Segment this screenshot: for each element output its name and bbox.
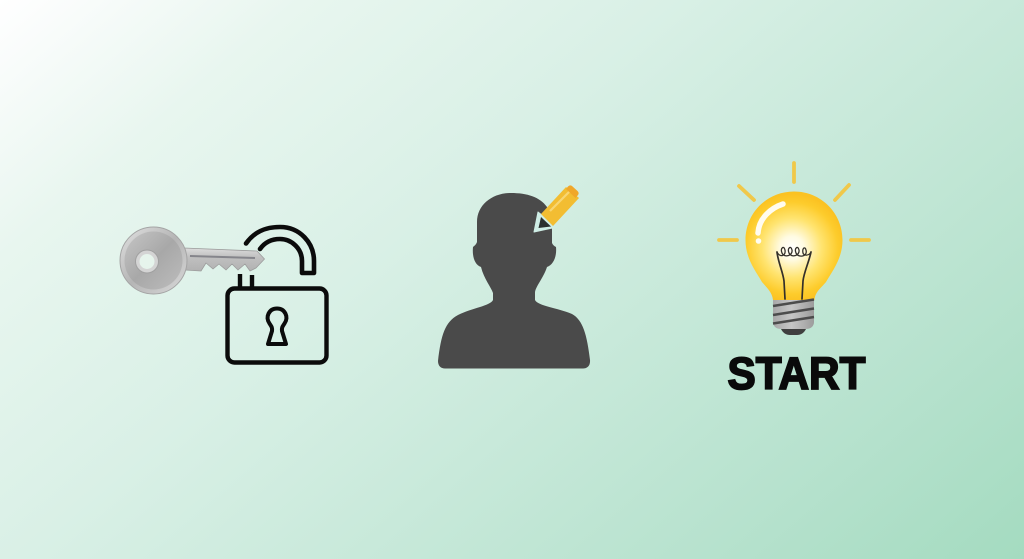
bulb highlight [758, 204, 783, 233]
padlock shackle stubs [240, 274, 252, 288]
icon: light bulb with rays [719, 163, 869, 335]
bulb filament [777, 247, 811, 299]
bulb rays [719, 163, 869, 240]
icon: person silhouette with pencil [438, 185, 590, 368]
START label: START [728, 348, 866, 399]
bulb screw base [773, 300, 814, 329]
bulb glass [746, 192, 842, 300]
person silhouette [438, 193, 590, 368]
padlock keyhole [268, 308, 286, 344]
padlock body [228, 288, 326, 362]
icon: open padlock [228, 227, 326, 362]
icon: silver key [120, 227, 264, 294]
padlock shackle [246, 227, 314, 273]
icon: key and open padlock [120, 227, 326, 362]
icon: pencil [534, 185, 579, 232]
